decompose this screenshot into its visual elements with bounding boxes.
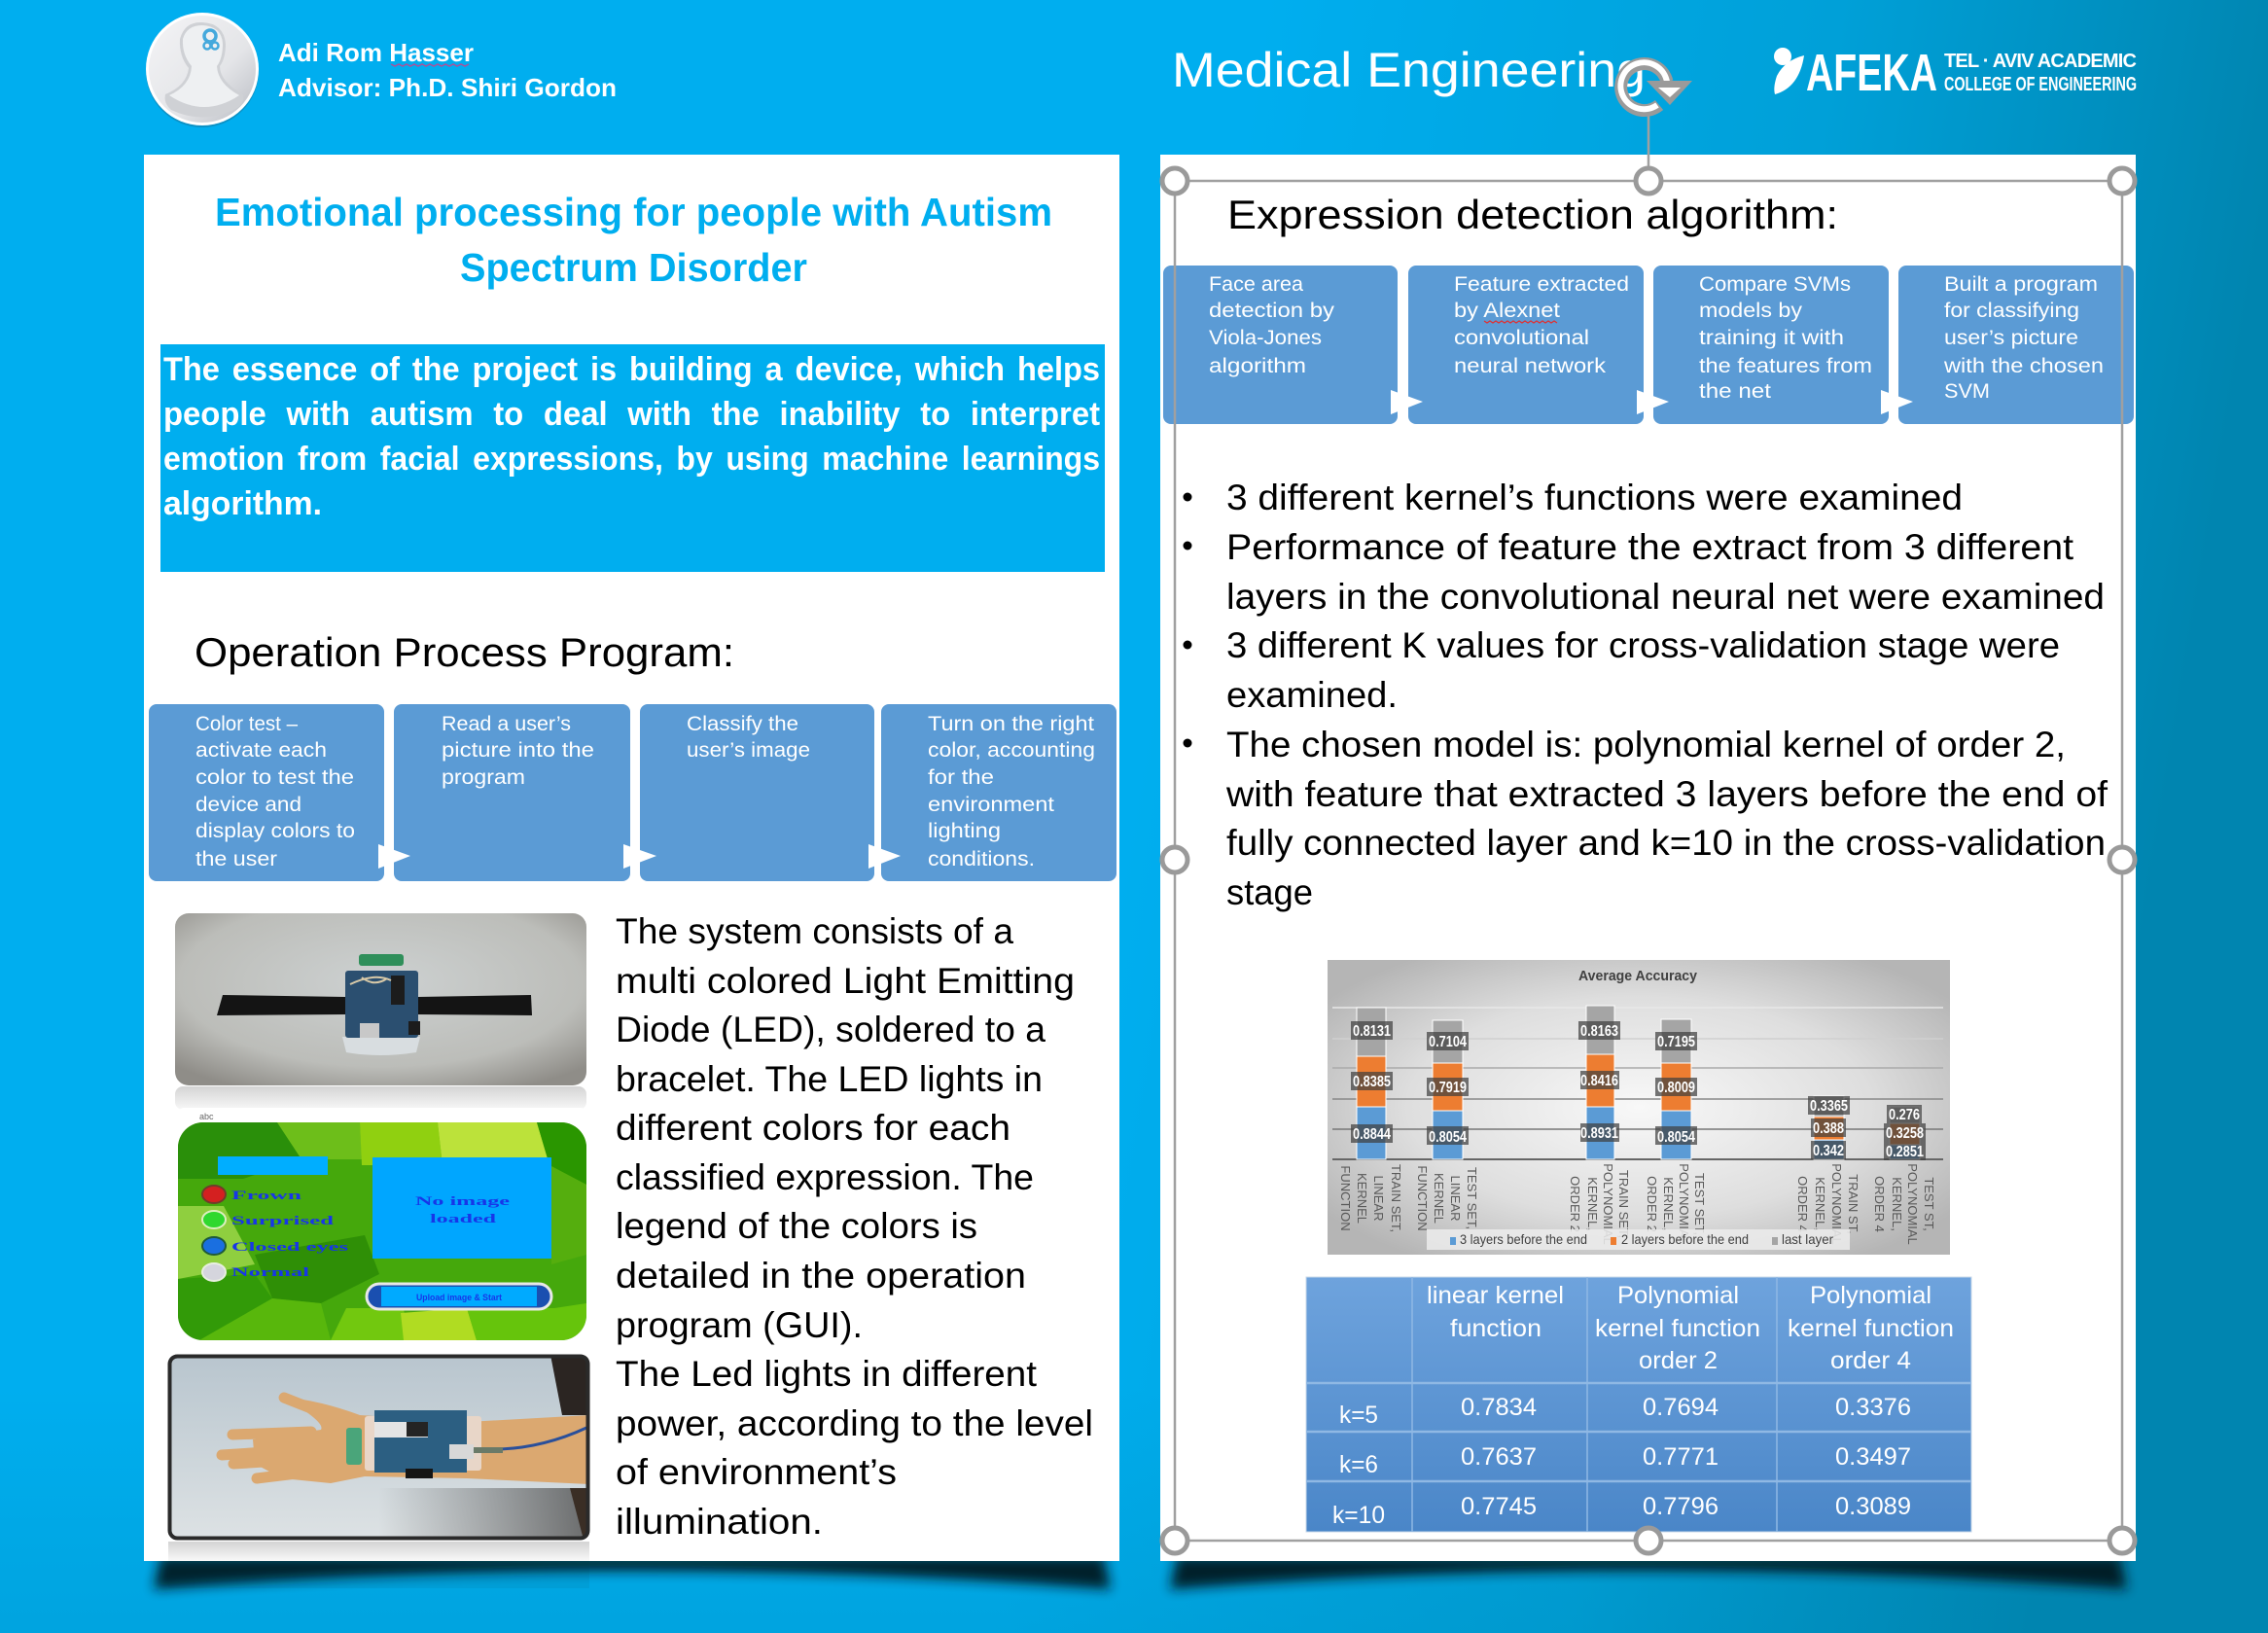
category axis labels: ORDER 4 — [1872, 1176, 1887, 1232]
Afeka logo: AFEKA — [1806, 44, 1937, 102]
table header: function — [1450, 1315, 1542, 1342]
findings bullet list: Performance of feature the extract from 3 different — [1226, 527, 2074, 567]
data labels: 0.7919 — [1429, 1080, 1467, 1096]
category axis labels: TEST SET, — [1465, 1167, 1479, 1229]
photo: bracelet device — [175, 913, 586, 1110]
category axis labels: FUNCTION — [1338, 1165, 1353, 1231]
step: compare SVMs: models by — [1699, 300, 1803, 322]
table header: order 2 — [1639, 1347, 1718, 1374]
panel: left — [144, 155, 1119, 1588]
results table — [1306, 1277, 1971, 1532]
step: feature extraction: convolutional — [1454, 327, 1589, 349]
findings bullet list: fully connected layer and k=10 in the cross-validation — [1226, 823, 2106, 863]
step 4: Turn on the right — [928, 713, 1094, 735]
GUI legend labels: Surprised — [231, 1213, 335, 1227]
category axis labels: POLYNOMIAL — [1829, 1163, 1844, 1245]
step 2 — [394, 704, 630, 881]
system description text: program (GUI). — [616, 1305, 863, 1345]
category axis labels: LINEAR — [1448, 1176, 1463, 1221]
step: face detection: Face area — [1209, 273, 1303, 296]
panel: right — [1160, 155, 2136, 1561]
system description text: detailed in the operation — [616, 1256, 1026, 1296]
department heading: Medical Engineering — [1172, 43, 1646, 97]
system description text: The Led lights in different — [616, 1354, 1038, 1394]
GUI legend labels — [231, 1188, 348, 1279]
data labels: 0.8844 — [1353, 1126, 1391, 1143]
step: build program: SVM — [1944, 380, 1990, 403]
step 4: conditions. — [928, 848, 1035, 870]
step: compare SVMs: the net — [1699, 380, 1771, 403]
table header: Polynomial — [1810, 1282, 1931, 1309]
table header: order 4 — [1830, 1347, 1911, 1374]
table rows: 0.7796 — [1643, 1493, 1719, 1520]
data labels: 0.8385 — [1353, 1074, 1391, 1090]
chart title: Average Accuracy — [1578, 968, 1698, 984]
table rows: 0.3089 — [1835, 1493, 1911, 1520]
Afeka logo: TEL · AVIV ACADEMIC — [1944, 51, 2137, 72]
category axis labels: TRAIN SET, — [1389, 1164, 1403, 1232]
category axis labels — [1338, 1163, 1936, 1245]
category axis labels: POLYNOMIAL — [1677, 1163, 1691, 1245]
GUI legend labels: Normal — [231, 1264, 310, 1279]
step: feature extraction — [1408, 266, 1644, 424]
step 2: Read a user’s — [442, 713, 571, 735]
project essence callout: The essence of the project is building a device, which helps — [163, 351, 1100, 388]
step 4: environment — [928, 794, 1054, 816]
poster title: Emotional processing for people with Autism — [215, 190, 1052, 234]
step: build program: for classifying — [1944, 300, 2079, 322]
category axis labels: ORDER 2 — [1568, 1176, 1582, 1232]
photo: bracelet on wrist — [168, 1355, 589, 1588]
data labels: 0.8054 — [1657, 1129, 1695, 1146]
findings bullet list — [1183, 478, 2109, 912]
Afeka logo — [1774, 44, 2137, 102]
findings bullet list: 3 different kernel’s functions were examined — [1226, 478, 1963, 517]
GUI image placeholder — [372, 1157, 551, 1259]
step 1: color to test the — [195, 766, 354, 789]
findings bullet list: layers in the convolutional neural net were examined — [1226, 577, 2105, 617]
chart legend — [1427, 1229, 1850, 1250]
step 4: for the — [928, 766, 994, 789]
icon: rotate handle — [1620, 62, 1692, 111]
step 4: lighting — [928, 820, 1001, 842]
data labels: 0.388 — [1813, 1120, 1844, 1137]
step: compare SVMs: the features from — [1699, 355, 1872, 377]
step 1: the user — [195, 848, 277, 870]
data labels: 0.8009 — [1657, 1080, 1695, 1096]
data labels: 0.8054 — [1429, 1129, 1467, 1146]
system description text: different colors for each — [616, 1108, 1010, 1148]
findings bullet list: stage — [1226, 872, 1313, 912]
table rows: 0.3376 — [1835, 1394, 1911, 1421]
data labels: 0.8131 — [1353, 1023, 1391, 1040]
step: face detection: algorithm — [1209, 355, 1306, 377]
author and advisor: Advisor: Ph.D. Shiri Gordon — [278, 73, 617, 102]
step: build program: Built a program — [1944, 273, 2098, 296]
project essence callout: emotion from facial expressions, by using machine learnings — [163, 441, 1100, 478]
system description text: of environment’s — [616, 1452, 897, 1492]
category axis labels: KERNEL, — [1813, 1177, 1827, 1231]
data labels: 0.276 — [1889, 1107, 1920, 1123]
author and advisor: Adi Rom Hasser — [278, 38, 474, 67]
data labels: 0.7195 — [1657, 1034, 1695, 1050]
table header — [1427, 1282, 1954, 1374]
chart: average accuracy — [1328, 960, 1950, 1255]
step 3: user’s image — [687, 739, 810, 762]
category axis labels: KERNEL, — [1661, 1177, 1676, 1231]
step 3 — [640, 704, 874, 881]
screenshot: GUI: abc — [199, 1112, 214, 1121]
table rows: k=5 — [1339, 1402, 1378, 1429]
category axis labels: TEST ST, — [1922, 1177, 1936, 1231]
system description text: classified expression. The — [616, 1157, 1034, 1197]
table rows: 0.7694 — [1643, 1394, 1719, 1421]
screenshot: GUI — [178, 1108, 586, 1340]
panel shadows — [154, 1556, 2127, 1589]
step: face detection — [1163, 266, 1398, 424]
table rows: 0.3497 — [1835, 1443, 1911, 1471]
step 2: program — [442, 766, 525, 789]
data labels: 0.8416 — [1580, 1073, 1618, 1089]
flow arrows — [1391, 390, 1913, 414]
table header: Polynomial — [1617, 1282, 1739, 1309]
heading: operation process: Operation Process Program: — [195, 629, 734, 675]
findings bullet list: examined. — [1226, 675, 1398, 715]
system description text: Diode (LED), soldered to a — [616, 1010, 1045, 1049]
table rows: 0.7771 — [1643, 1443, 1719, 1471]
algorithm flow — [1163, 266, 2134, 424]
step: feature extraction: by Alexnet — [1454, 300, 1560, 322]
step: feature extraction: Feature extracted — [1454, 273, 1629, 296]
step: face detection: Viola-Jones — [1209, 327, 1322, 349]
data labels: 0.2851 — [1886, 1144, 1924, 1160]
flow arrows — [378, 844, 901, 869]
step 4: color, accounting — [928, 739, 1095, 762]
table rows: 0.7745 — [1461, 1493, 1537, 1520]
step 1: Color test – — [195, 713, 298, 735]
heading: expression detection: Expression detection algorithm: — [1227, 192, 1838, 237]
system description text: illumination. — [616, 1502, 823, 1542]
data labels: 0.8163 — [1580, 1023, 1618, 1040]
step 3: Classify the — [687, 713, 798, 735]
category axis labels: KERNEL — [1432, 1173, 1446, 1224]
step: compare SVMs: Compare SVMs — [1699, 273, 1851, 296]
project essence callout: people with autism to deal with the inability to interpret — [163, 396, 1100, 433]
chart legend: 2 layers before the end — [1621, 1231, 1749, 1247]
table header: kernel function — [1595, 1315, 1760, 1342]
icon: gears — [204, 30, 218, 49]
findings bullet list: 3 different K values for cross-validation stage were — [1226, 625, 2060, 665]
author and advisor — [278, 38, 617, 102]
table rows: 0.7834 — [1461, 1394, 1537, 1421]
table rows: k=10 — [1332, 1502, 1385, 1529]
system description text — [616, 911, 1093, 1542]
project essence callout: algorithm. — [163, 485, 322, 522]
category axis labels: ORDER 2 — [1645, 1176, 1659, 1232]
step 1: display colors to — [195, 820, 355, 842]
category axis labels: TRAIN ST, — [1846, 1174, 1860, 1234]
category axis labels: KERNEL, — [1585, 1177, 1600, 1231]
data labels — [1351, 1021, 1926, 1160]
poster title — [215, 190, 1052, 290]
chart legend: 3 layers before the end — [1460, 1231, 1587, 1247]
category axis labels: FUNCTION — [1415, 1165, 1430, 1231]
table rows — [1332, 1394, 1911, 1529]
system description text: power, according to the level — [616, 1403, 1093, 1443]
GUI status lights — [202, 1186, 226, 1281]
data labels: 0.3258 — [1886, 1125, 1924, 1142]
chart legend: last layer — [1782, 1231, 1833, 1247]
category axis labels: KERNEL, — [1890, 1177, 1904, 1231]
category axis labels: KERNEL — [1355, 1173, 1369, 1224]
avatar icon — [146, 13, 259, 127]
step: compare SVMs — [1653, 266, 1889, 424]
data labels: 0.7104 — [1429, 1034, 1467, 1050]
data labels: 0.3365 — [1810, 1098, 1848, 1115]
step 2: picture into the — [442, 739, 594, 762]
category axis labels: POLYNOMIAL — [1601, 1163, 1615, 1245]
step: compare SVMs: training it with — [1699, 327, 1844, 349]
category axis labels: POLYNOMIAL — [1905, 1163, 1920, 1245]
data labels: 0.8931 — [1580, 1125, 1618, 1142]
stacked bars — [1357, 1006, 1920, 1159]
step 1: device and — [195, 794, 301, 816]
selection frame with handles — [1162, 62, 2135, 1553]
GUI upload button: Upload image & Start — [416, 1293, 502, 1302]
GUI legend labels: Closed eyes — [231, 1239, 348, 1254]
category axis labels: ORDER 4 — [1795, 1176, 1810, 1232]
poster title: Spectrum Disorder — [460, 245, 807, 290]
findings bullet list: The chosen model is: polynomial kernel of order 2, — [1226, 725, 2066, 764]
step: face detection: detection by — [1209, 300, 1335, 322]
step: build program: user’s picture — [1944, 327, 2078, 349]
GUI image placeholder: No image — [415, 1193, 510, 1208]
table header: kernel function — [1788, 1315, 1954, 1342]
findings bullet list: with feature that extracted 3 layers before the end of — [1225, 774, 2109, 814]
system description text: multi colored Light Emitting — [616, 961, 1075, 1001]
step 4 — [881, 704, 1116, 881]
step: feature extraction: neural network — [1454, 355, 1607, 377]
category axis labels: LINEAR — [1371, 1176, 1386, 1221]
Afeka logo: COLLEGE OF ENGINEERING — [1944, 74, 2137, 95]
step: build program — [1898, 266, 2134, 424]
system description text: The system consists of a — [616, 911, 1013, 951]
step 1: activate each — [195, 739, 327, 762]
category axis labels: TRAIN SET, — [1616, 1170, 1631, 1238]
data labels: 0.342 — [1813, 1143, 1844, 1159]
table rows: k=6 — [1339, 1451, 1378, 1478]
system description text: bracelet. The LED lights in — [616, 1059, 1043, 1099]
table rows: 0.7637 — [1461, 1443, 1537, 1471]
step: build program: with the chosen — [1943, 355, 2104, 377]
GUI legend labels: Frown — [231, 1188, 302, 1202]
GUI upload button — [367, 1284, 551, 1309]
process flow — [149, 704, 1116, 881]
GUI image placeholder: loaded — [430, 1211, 497, 1225]
project essence callout — [160, 344, 1105, 572]
system description text: legend of the colors is — [616, 1206, 977, 1246]
table header: linear kernel — [1427, 1282, 1564, 1309]
step 1 — [149, 704, 384, 881]
category axis labels: TEST SET, — [1692, 1173, 1707, 1235]
